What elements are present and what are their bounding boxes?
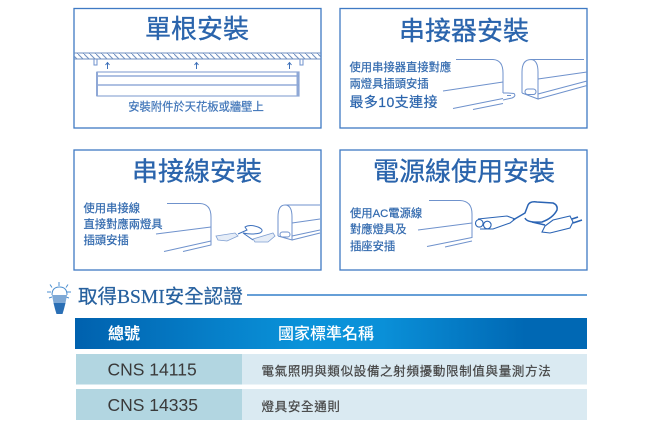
row: CNS 14115: 電氣照明與類似設備之射頻擾動限制值與量測方法 [262,364,551,378]
connector cable [216,226,275,242]
heading: BSMI certification: 取得BSMI安全認證 [78,286,243,308]
left lamp with connector [443,60,515,110]
row: CNS 14335: CNS 14335 [108,395,198,415]
description: cable: 直接對應兩燈具 [84,217,163,231]
description: power cord: 對應燈具及 [350,222,406,236]
description: connector: 最多10支連接 [350,94,438,110]
icon: light bulb [47,282,71,314]
panel: connector install [340,8,587,128]
ceiling hatch [74,53,321,59]
description: cable [84,201,163,247]
heading: cable install: 串接線安裝 [132,156,262,186]
lamp end [418,200,472,247]
row: CNS 14335 [76,389,587,420]
row: CNS 14335: 燈具安全通則 [262,399,341,414]
panel: power cord install [340,150,587,270]
left lamp [156,204,211,252]
description: power cord [350,206,422,253]
row: CNS 14115 [76,354,587,384]
right lamp end [522,60,587,99]
table header [75,318,587,349]
mounting clips [94,59,303,65]
table: national standards [75,318,587,420]
right lamp end [278,205,320,240]
table header: 國家標準名稱 [278,324,374,343]
description: cable: 插頭安插 [84,233,129,247]
description: power cord: 插座安插 [350,239,395,253]
table header: 總號 [108,324,140,343]
icon: AC power cord [476,202,582,233]
panel: cable install [74,150,321,270]
description: connector: 兩燈具插頭安插 [350,76,429,90]
heading: single mount: 單根安裝 [145,14,249,44]
heading: power cord install: 電源線使用安裝 [373,156,555,186]
caption: mount on ceiling or wall: 安裝附件於天花板或牆壁上 [128,100,264,114]
icon: up arrows [106,62,292,69]
panel: single mount [74,8,321,128]
description: power cord: 使用AC電源線 [350,206,422,220]
description: cable: 使用串接線 [84,201,140,215]
tube lamp [97,72,299,96]
heading: connector install: 串接器安裝 [399,16,529,46]
description: connector [350,60,451,110]
description: connector: 使用串接器直接對應 [350,60,451,74]
row: CNS 14115: CNS 14115 [108,360,197,380]
